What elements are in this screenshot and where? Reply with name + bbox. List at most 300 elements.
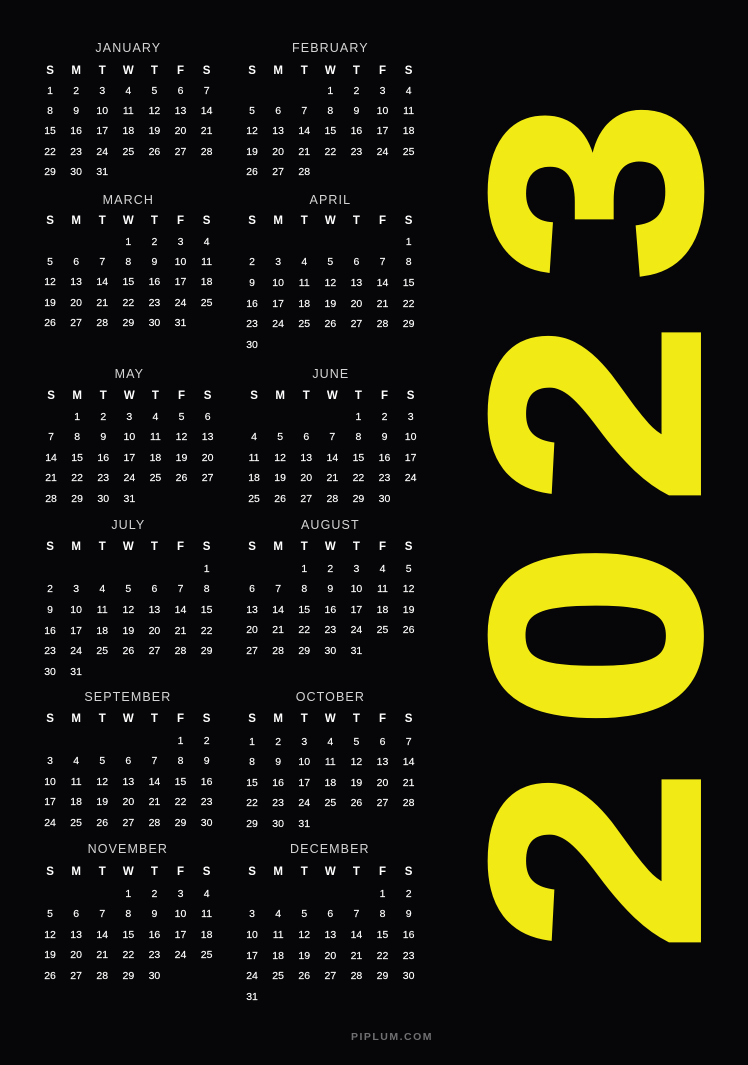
day grid: December: 23 xyxy=(403,950,414,962)
day grid: September: 21 xyxy=(149,796,160,808)
day grid: June: S xyxy=(250,390,258,402)
day grid: June: 22 xyxy=(353,472,364,484)
day grid: April: S xyxy=(405,215,412,227)
day grid: August: 14 xyxy=(272,604,284,616)
day grid: March: 30 xyxy=(149,317,160,329)
day grid: August: 24 xyxy=(351,624,362,636)
day grid: February: 14 xyxy=(298,125,310,137)
day grid: November: 11 xyxy=(201,908,212,920)
day grid: July: 29 xyxy=(201,645,212,657)
day grid: April: 21 xyxy=(377,298,388,310)
day grid: July: 24 xyxy=(70,645,82,657)
day grid: July: T xyxy=(151,541,158,553)
month title: December: DECEMBER xyxy=(290,842,370,856)
day grid: June: 16 xyxy=(379,452,390,464)
day grid: February: 8 xyxy=(327,105,333,117)
day grid: August: 8 xyxy=(301,583,307,595)
day grid: April: T xyxy=(353,215,360,227)
day grid: December: 16 xyxy=(403,929,414,941)
day grid: February: S xyxy=(405,65,412,77)
day grid: February: 26 xyxy=(246,166,258,178)
day grid: April: 10 xyxy=(272,277,284,289)
day grid: September: 24 xyxy=(44,817,56,829)
month title: August: AUGUST xyxy=(301,518,360,532)
day grid: February: S xyxy=(248,65,256,77)
day grid: June: 27 xyxy=(300,493,312,505)
day grid: May: 17 xyxy=(123,452,135,464)
day grid: June: 30 xyxy=(379,493,390,505)
day grid: October: M xyxy=(273,713,283,725)
day grid: June: 13 xyxy=(300,452,312,464)
day grid: June: 26 xyxy=(274,493,286,505)
day grid: August xyxy=(246,541,414,657)
day grid: May xyxy=(45,390,214,505)
day grid: October: 30 xyxy=(272,818,284,830)
day grid: May: 26 xyxy=(176,472,187,484)
day grid: November: 22 xyxy=(122,949,134,961)
day grid: September xyxy=(44,713,212,829)
day grid: November: 12 xyxy=(44,929,56,941)
day grid: December: T xyxy=(353,866,360,878)
day grid: August: 25 xyxy=(377,624,388,636)
day grid: March: 23 xyxy=(149,297,160,309)
day grid: September: 11 xyxy=(71,776,82,788)
day grid: October: 15 xyxy=(246,777,258,789)
day grid: July: 3 xyxy=(73,583,79,595)
day grid: July: T xyxy=(99,541,106,553)
month title: March: MARCH xyxy=(103,193,154,207)
day grid: January xyxy=(44,65,212,178)
day grid: December: 11 xyxy=(273,929,284,941)
day grid: September: 20 xyxy=(122,796,134,808)
day grid: May: 1 xyxy=(74,411,80,423)
day grid: August: M xyxy=(273,541,283,553)
day grid: October: 9 xyxy=(275,756,281,768)
day grid: May: 31 xyxy=(123,493,135,505)
day grid: September: M xyxy=(71,713,81,725)
day grid: May: 27 xyxy=(202,472,213,484)
day grid: December: 3 xyxy=(249,908,255,920)
day grid: November: 26 xyxy=(44,970,56,982)
day grid: October: 13 xyxy=(377,756,388,768)
day grid: July: S xyxy=(203,541,210,553)
day grid: September: 22 xyxy=(175,796,186,808)
day grid: November: 9 xyxy=(152,908,157,920)
day grid: March: 2 xyxy=(152,236,157,248)
day grid: July: 6 xyxy=(152,583,157,595)
day grid: May: 29 xyxy=(71,493,83,505)
day grid: March: T xyxy=(99,215,106,227)
day grid: October: 21 xyxy=(403,777,414,789)
month title: July: JULY xyxy=(111,518,145,532)
day grid: June: W xyxy=(327,390,338,402)
day grid: July: 27 xyxy=(149,645,160,657)
day grid: January: 26 xyxy=(149,146,160,158)
day grid: May: 24 xyxy=(123,472,135,484)
day grid: May: W xyxy=(124,390,135,402)
day grid: April: 16 xyxy=(246,298,258,310)
day grid: October: 12 xyxy=(351,756,362,768)
day grid: September: T xyxy=(99,713,106,725)
day grid: February: M xyxy=(273,65,283,77)
month title: September: SEPTEMBER xyxy=(84,690,171,704)
day grid: August: 6 xyxy=(249,583,255,595)
day grid: August: 13 xyxy=(246,604,258,616)
day grid: January: 16 xyxy=(70,125,82,137)
day grid: October: 29 xyxy=(246,818,258,830)
day grid: April: 30 xyxy=(246,339,258,351)
day grid: June: 15 xyxy=(353,452,364,464)
day grid: May: M xyxy=(72,390,82,402)
day grid: March: 18 xyxy=(201,276,212,288)
panel: November xyxy=(44,842,212,982)
day grid: March: S xyxy=(46,215,54,227)
day grid: February: 3 xyxy=(380,85,385,97)
day grid: December: 28 xyxy=(351,970,362,982)
day grid: May: 13 xyxy=(202,431,213,443)
day grid: July: 19 xyxy=(122,624,134,636)
day grid: June: 5 xyxy=(277,431,283,443)
day grid: April: 29 xyxy=(403,318,414,330)
day grid: January: 12 xyxy=(149,105,160,117)
day grid: March: 6 xyxy=(73,256,79,268)
day grid: March: 27 xyxy=(70,317,82,329)
day grid: March: 14 xyxy=(96,276,108,288)
day grid: November: 28 xyxy=(96,970,108,982)
day grid: May: 19 xyxy=(176,452,187,464)
day grid: November: 24 xyxy=(175,949,186,961)
day grid: June: 23 xyxy=(379,472,390,484)
day grid: September: 25 xyxy=(70,817,82,829)
day grid: April: 14 xyxy=(377,277,388,289)
day grid: October: 22 xyxy=(246,797,258,809)
day grid: March: 31 xyxy=(175,317,186,329)
day grid: June: 11 xyxy=(249,452,260,464)
day grid: May: 7 xyxy=(48,431,54,443)
day grid: January: 20 xyxy=(175,125,186,137)
day grid: November: M xyxy=(71,866,81,878)
day grid: November: 18 xyxy=(201,929,212,941)
day grid: May: 20 xyxy=(202,452,213,464)
day grid: June xyxy=(248,390,416,505)
day grid: March: 19 xyxy=(44,297,56,309)
day grid: December: 1 xyxy=(380,888,385,900)
day grid: April: T xyxy=(301,215,308,227)
day grid: September: 26 xyxy=(96,817,108,829)
day grid: March: 8 xyxy=(125,256,131,268)
panel: April xyxy=(246,193,414,351)
day grid: August: 29 xyxy=(298,645,310,657)
day grid: June: F xyxy=(381,390,388,402)
day grid: August: 31 xyxy=(351,645,362,657)
day grid: July: 30 xyxy=(44,666,56,678)
day grid: July: 23 xyxy=(44,645,56,657)
day grid: May: 4 xyxy=(152,411,158,423)
day grid: December: 26 xyxy=(298,970,310,982)
day grid: July: 13 xyxy=(149,604,160,616)
day grid: December: 9 xyxy=(406,908,412,920)
day grid: August: 4 xyxy=(380,563,385,575)
day grid: January: 7 xyxy=(204,85,210,97)
day grid: April: F xyxy=(379,215,386,227)
day grid: October: 5 xyxy=(354,736,359,748)
day grid: January: 9 xyxy=(73,105,79,117)
day grid: October: 17 xyxy=(298,777,310,789)
footer credit: PIPLUM.COM xyxy=(351,1031,433,1043)
day grid: June: 14 xyxy=(326,452,338,464)
day grid: February: 7 xyxy=(301,105,307,117)
day grid: March: 11 xyxy=(201,256,212,268)
day grid: September: 6 xyxy=(125,755,131,767)
day grid: August: T xyxy=(301,541,308,553)
day grid: January: 24 xyxy=(96,146,108,158)
day grid: July: 14 xyxy=(175,604,186,616)
month title: January: JANUARY xyxy=(95,41,161,55)
day grid: July: 26 xyxy=(122,645,134,657)
day grid: September: T xyxy=(151,713,158,725)
day grid: April: 7 xyxy=(380,256,385,268)
day grid: September: 5 xyxy=(99,755,105,767)
day grid: March: 3 xyxy=(178,236,183,248)
day grid: March: 10 xyxy=(175,256,186,268)
day grid: February: 10 xyxy=(377,105,388,117)
day grid: July: 21 xyxy=(175,624,186,636)
day grid: April: M xyxy=(273,215,283,227)
day grid: March: 26 xyxy=(44,317,56,329)
day grid: October: 24 xyxy=(298,797,310,809)
month title: October: OCTOBER xyxy=(296,690,365,704)
day grid: October: 11 xyxy=(325,756,336,768)
day grid: January: 4 xyxy=(125,85,131,97)
day grid: October: 3 xyxy=(301,736,307,748)
day grid: January: S xyxy=(203,65,210,77)
day grid: October: S xyxy=(248,713,256,725)
day grid: January: W xyxy=(123,65,134,77)
day grid: September: S xyxy=(203,713,210,725)
day grid: September: 28 xyxy=(149,817,160,829)
day grid: February: 15 xyxy=(324,125,336,137)
day grid: May: 10 xyxy=(123,431,135,443)
day grid: January: 27 xyxy=(175,146,186,158)
day grid: October: 18 xyxy=(324,777,336,789)
day grid: October: W xyxy=(325,713,336,725)
day grid: June: 12 xyxy=(274,452,286,464)
day grid: September: 2 xyxy=(204,735,210,747)
day grid: May: 18 xyxy=(150,452,161,464)
day grid: December xyxy=(246,866,414,1003)
month title: May: MAY xyxy=(115,367,144,381)
day grid: November: 23 xyxy=(149,949,160,961)
day grid: January: 23 xyxy=(70,146,82,158)
day grid: October: 10 xyxy=(298,756,310,768)
day grid: June: 28 xyxy=(326,493,338,505)
day grid: August: S xyxy=(248,541,256,553)
day grid: February: 1 xyxy=(327,85,333,97)
day grid: June: 3 xyxy=(408,411,414,423)
day grid: April: 20 xyxy=(351,298,362,310)
day grid: April: S xyxy=(248,215,256,227)
day grid: September: 3 xyxy=(47,755,53,767)
day grid: September: 27 xyxy=(122,817,134,829)
day grid: May: 9 xyxy=(100,431,106,443)
day grid: March: 7 xyxy=(99,256,105,268)
day grid: October: 23 xyxy=(272,797,284,809)
day grid: July: 12 xyxy=(122,604,134,616)
day grid: November: 2 xyxy=(152,888,157,900)
day grid: June: S xyxy=(407,390,414,402)
day grid: October: 14 xyxy=(403,756,414,768)
day grid: November: 5 xyxy=(47,908,53,920)
day grid: June: M xyxy=(275,390,285,402)
day grid: August: 21 xyxy=(272,624,284,636)
day grid: August: 23 xyxy=(324,624,336,636)
day grid: September: 14 xyxy=(149,776,160,788)
panel: January xyxy=(44,41,212,178)
day grid: April: 11 xyxy=(299,277,310,289)
day grid: March: M xyxy=(71,215,81,227)
day grid: December: 21 xyxy=(351,950,362,962)
day grid: January: 15 xyxy=(44,125,56,137)
day grid: November: 13 xyxy=(70,929,82,941)
day grid: August: 28 xyxy=(272,645,284,657)
day grid: November: 19 xyxy=(44,949,56,961)
day grid: March: 21 xyxy=(96,297,108,309)
day grid: April: 22 xyxy=(403,298,414,310)
day grid: January: 19 xyxy=(149,125,160,137)
day grid: September: 12 xyxy=(96,776,108,788)
day grid: September: 19 xyxy=(96,796,108,808)
day grid: August: 19 xyxy=(403,604,414,616)
day grid: March xyxy=(44,215,212,329)
day grid: February: 23 xyxy=(351,146,362,158)
day grid: May: 12 xyxy=(176,431,187,443)
day grid: December: T xyxy=(301,866,308,878)
day grid: February: 5 xyxy=(249,105,255,117)
day grid: November: S xyxy=(46,866,54,878)
day grid: February: F xyxy=(379,65,386,77)
day grid: December: 20 xyxy=(324,950,336,962)
day grid: April: 17 xyxy=(272,298,284,310)
day grid: January: 13 xyxy=(175,105,186,117)
day grid: January: 8 xyxy=(47,105,53,117)
day grid: May: 11 xyxy=(150,431,161,443)
day grid: January: F xyxy=(177,65,184,77)
panel: October xyxy=(246,690,414,830)
day grid: July: 16 xyxy=(44,624,56,636)
day grid: November xyxy=(44,866,212,982)
day grid: December: 17 xyxy=(246,950,258,962)
day grid: September: F xyxy=(177,713,184,725)
panel: March xyxy=(44,193,212,329)
day grid: May: S xyxy=(204,390,211,402)
day grid: February: 4 xyxy=(406,85,412,97)
day grid: October: 25 xyxy=(324,797,336,809)
day grid: January: T xyxy=(99,65,106,77)
day grid: April: 4 xyxy=(301,256,307,268)
day grid: December: 24 xyxy=(246,970,258,982)
day grid: March: 4 xyxy=(204,236,210,248)
day grid: November: 7 xyxy=(99,908,105,920)
day grid: August: 5 xyxy=(406,563,412,575)
day grid: December: 19 xyxy=(298,950,310,962)
day grid: December: W xyxy=(325,866,336,878)
day grid: July: 9 xyxy=(47,604,53,616)
day grid: August: 7 xyxy=(275,583,281,595)
day grid: September: W xyxy=(123,713,134,725)
day grid: January: 5 xyxy=(152,85,157,97)
day grid: February: 28 xyxy=(298,166,310,178)
day grid: February: 21 xyxy=(298,146,310,158)
day grid: March: 15 xyxy=(122,276,134,288)
day grid: December: F xyxy=(379,866,386,878)
day grid: October: T xyxy=(301,713,308,725)
day grid: April: 28 xyxy=(377,318,388,330)
day grid: April: 13 xyxy=(351,277,362,289)
day grid: December: 6 xyxy=(327,908,333,920)
day grid: December: 2 xyxy=(406,888,412,900)
day grid: February: 16 xyxy=(351,125,362,137)
day grid: December: 10 xyxy=(246,929,258,941)
day grid: November: 1 xyxy=(125,888,131,900)
month title: November: NOVEMBER xyxy=(88,842,168,856)
day grid: March: 17 xyxy=(175,276,186,288)
day grid: April: 5 xyxy=(327,256,333,268)
day grid: November: 27 xyxy=(70,970,82,982)
day grid: October: 28 xyxy=(403,797,414,809)
day grid: June: 20 xyxy=(300,472,312,484)
day grid: June: 19 xyxy=(274,472,286,484)
day grid: May: 6 xyxy=(205,411,211,423)
day grid: January: 6 xyxy=(178,85,183,97)
day grid: October: 8 xyxy=(249,756,255,768)
day grid: February: 25 xyxy=(403,146,414,158)
day grid: November: T xyxy=(99,866,106,878)
day grid: May: 8 xyxy=(74,431,80,443)
day grid: December: 7 xyxy=(354,908,359,920)
panel: December xyxy=(246,842,414,1003)
day grid: January: S xyxy=(46,65,54,77)
day grid: October: S xyxy=(405,713,412,725)
day grid: September: 17 xyxy=(44,796,56,808)
day grid: March: 22 xyxy=(122,297,134,309)
day grid: April: 8 xyxy=(406,256,412,268)
day grid: June: 4 xyxy=(251,431,257,443)
panel: May xyxy=(45,367,214,505)
day grid: July: 20 xyxy=(149,624,160,636)
day grid: August: S xyxy=(405,541,412,553)
day grid: December: 22 xyxy=(377,950,388,962)
day grid: October: 4 xyxy=(327,736,333,748)
day grid: April: 9 xyxy=(249,277,255,289)
day grid: June: 7 xyxy=(329,431,335,443)
day grid: November: 30 xyxy=(149,970,160,982)
day grid: July: 1 xyxy=(204,563,210,575)
day grid: May: 23 xyxy=(97,472,109,484)
day grid: June: 10 xyxy=(405,431,416,443)
day grid: September: 1 xyxy=(178,735,183,747)
day grid: December: 15 xyxy=(377,929,388,941)
day grid: June: 17 xyxy=(405,452,416,464)
day grid: April: 27 xyxy=(351,318,362,330)
day grid: December: S xyxy=(405,866,412,878)
panel: September xyxy=(44,690,212,829)
day grid: January: T xyxy=(151,65,158,77)
day grid: November: 29 xyxy=(122,970,134,982)
day grid: October: 31 xyxy=(298,818,310,830)
day grid: March: 24 xyxy=(175,297,186,309)
day grid: May: 22 xyxy=(71,472,83,484)
day grid: September: 23 xyxy=(201,796,212,808)
